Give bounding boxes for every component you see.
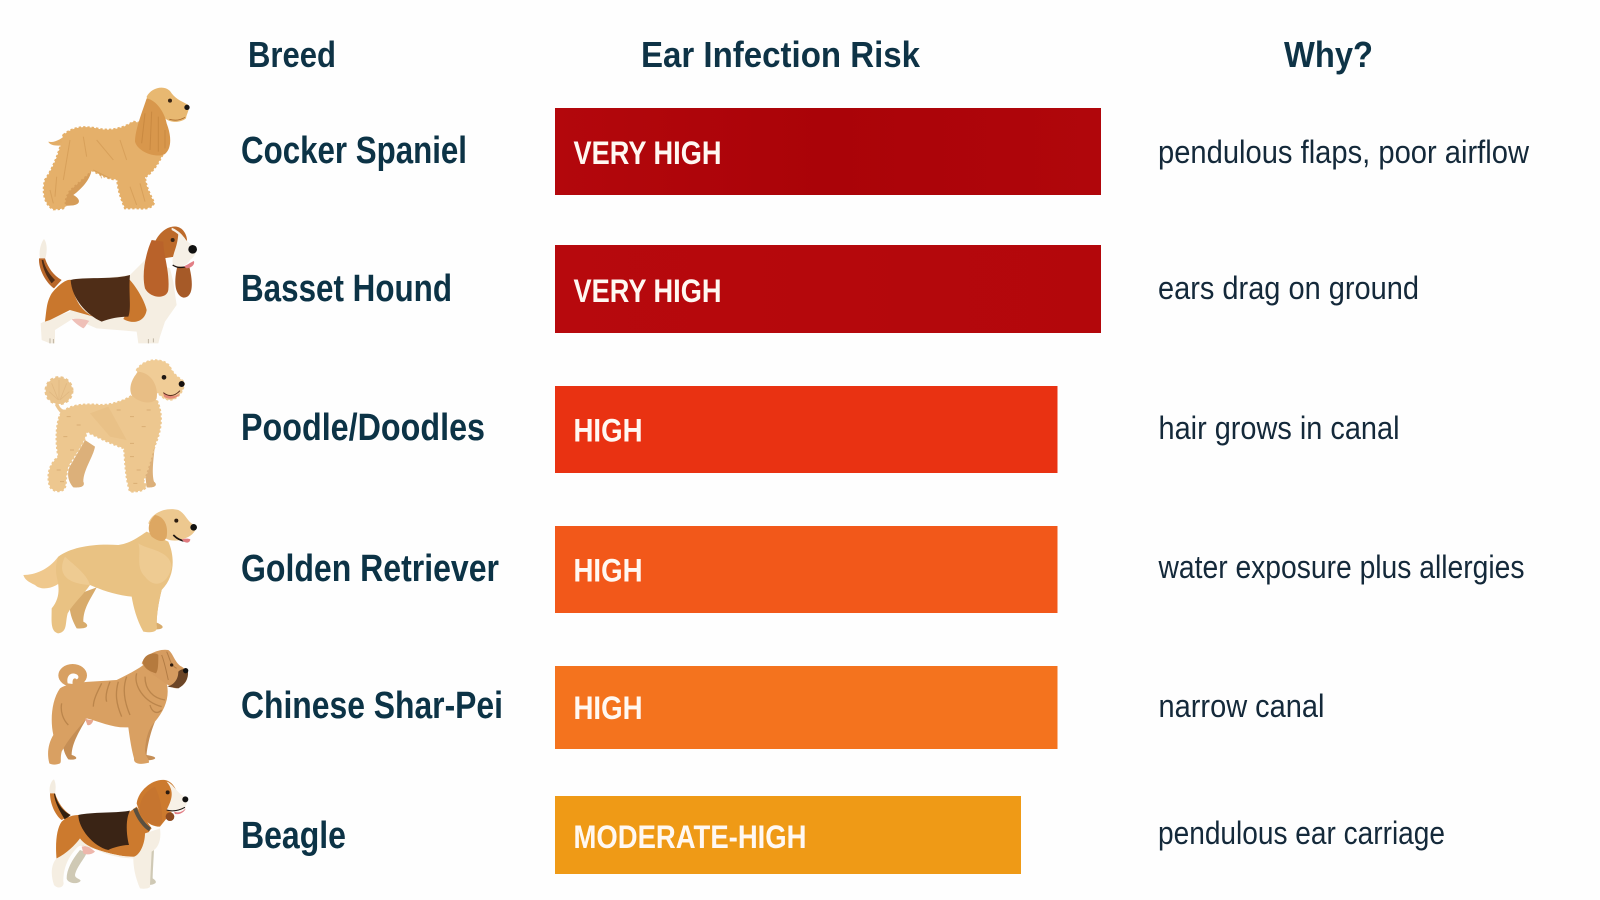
row: Chinese Shar-Pei — [48, 650, 1325, 765]
row: Poodle/Doodles — [46, 360, 1400, 492]
icon: shar-pei — [48, 650, 188, 765]
breed name: Poodle/Doodles: Poodle/Doodles — [241, 407, 485, 449]
icon: beagle — [50, 779, 188, 889]
risk bar: high — [555, 666, 1058, 749]
reason: pendulous ear carriage — [1158, 815, 1445, 851]
risk bar: high — [555, 526, 1058, 613]
risk bar: moderate-high: MODERATE-HIGH — [574, 819, 806, 855]
heading: Breed: Breed — [248, 34, 336, 75]
risk bar: high: HIGH — [574, 412, 642, 448]
risk bar: very high: VERY HIGH — [574, 135, 722, 171]
breed name: Chinese Shar-Pei: Chinese Shar-Pei — [241, 685, 503, 727]
reason: hair grows in canal — [1158, 410, 1400, 446]
breed name: Cocker Spaniel: Cocker Spaniel — [241, 130, 467, 172]
breed name: Beagle: Beagle — [241, 815, 346, 857]
row: Beagle — [50, 779, 1445, 889]
risk bar: moderate-high — [555, 796, 1021, 874]
risk bar: very high — [555, 245, 1101, 333]
reason: pendulous flaps, poor airflow — [1158, 134, 1530, 170]
heading: Why?: Why? — [1284, 34, 1373, 75]
reason: water exposure plus allergies — [1158, 549, 1524, 585]
row: Basset Hound — [39, 226, 1419, 343]
icon: golden retriever — [23, 509, 197, 633]
risk bar: very high — [555, 108, 1101, 195]
breed name: Basset Hound: Basset Hound — [241, 268, 452, 310]
row: Cocker Spaniel — [44, 88, 1530, 209]
icon: poodle — [46, 360, 185, 492]
icon: cocker spaniel — [44, 88, 190, 209]
reason: ears drag on ground — [1158, 270, 1419, 306]
icon: basset hound — [39, 226, 197, 343]
risk bar: high: HIGH — [574, 552, 642, 588]
column headings — [248, 34, 1373, 75]
risk bar: very high: VERY HIGH — [574, 273, 722, 309]
reason: narrow canal — [1158, 688, 1324, 724]
heading: Ear Infection Risk: Ear Infection Risk — [641, 34, 921, 75]
breed name: Golden Retriever: Golden Retriever — [241, 548, 499, 590]
risk bar: high: HIGH — [574, 690, 642, 726]
row: Golden Retriever — [23, 509, 1524, 633]
risk bar: high — [555, 386, 1058, 473]
